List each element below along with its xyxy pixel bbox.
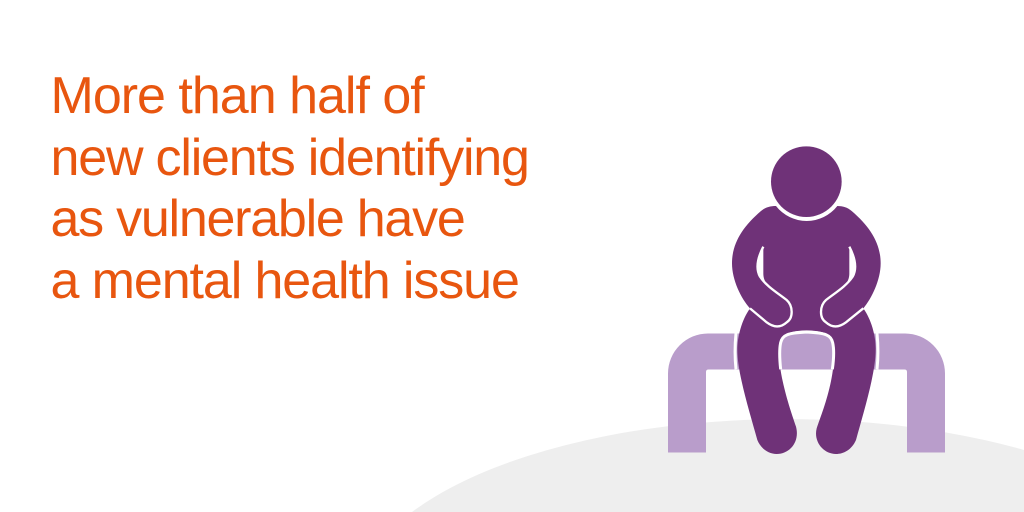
person body <box>732 206 881 454</box>
ground mound <box>412 419 1024 512</box>
title: More than half of <box>50 67 424 125</box>
title: a mental health issue <box>50 252 519 310</box>
title: as vulnerable have <box>50 190 465 248</box>
leg outlines <box>735 332 878 369</box>
title <box>50 67 529 310</box>
icon: seated person <box>732 146 881 454</box>
person head <box>771 146 842 217</box>
left arm outline <box>750 247 792 326</box>
left arm gap <box>757 247 767 284</box>
icon: bench <box>668 334 945 452</box>
right arm gap <box>846 247 855 284</box>
right arm outline <box>821 247 863 326</box>
title: new clients identifying <box>50 129 529 187</box>
